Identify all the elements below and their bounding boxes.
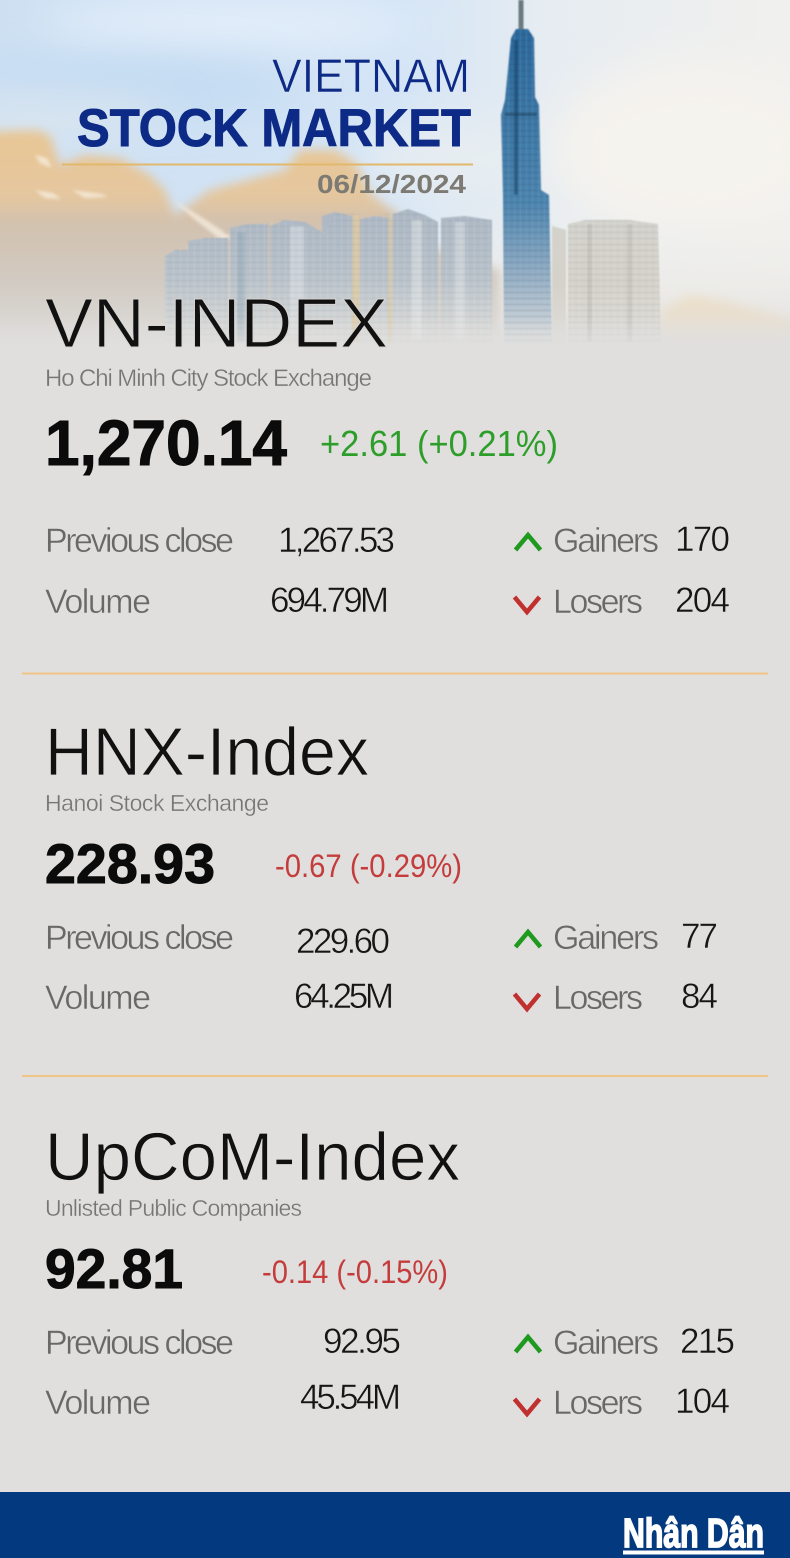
panel: UpCoM-Index [45, 1119, 735, 1422]
panel: VN-INDEX [45, 284, 730, 621]
title [77, 49, 471, 158]
previous close: Previous close [45, 919, 234, 957]
volume: 64.25M [294, 977, 394, 1016]
gainers: 170 [675, 520, 730, 559]
volume: Volume [45, 1384, 151, 1422]
title: VIETNAM [272, 49, 470, 102]
losers [514, 581, 730, 621]
gainers [516, 1322, 735, 1362]
footer bar [0, 1492, 790, 1558]
index value: 1,270.14 [45, 407, 287, 479]
losers: Losers [553, 1384, 643, 1422]
heading: VN-INDEX: VN-INDEX [45, 284, 388, 362]
previous close [45, 521, 395, 560]
volume: Volume [45, 979, 151, 1017]
panel: HNX-Index [45, 714, 718, 1017]
previous close: Previous close [45, 522, 234, 560]
bottom haze over skyline [0, 318, 790, 352]
header photo: sky and clouds [0, 0, 790, 375]
losers: 204 [675, 581, 730, 620]
gainers: 215 [680, 1322, 735, 1361]
index value: 228.93 [45, 832, 215, 895]
heading: HNX-Index: HNX-Index [45, 714, 369, 790]
gainers [516, 917, 718, 957]
volume: Volume [45, 583, 151, 621]
skyline: landmark tower [501, 0, 552, 345]
title: STOCK MARKET [77, 99, 471, 158]
volume: 45.54M [300, 1378, 401, 1417]
volume [45, 977, 394, 1017]
losers: Losers [553, 583, 643, 621]
losers [514, 1382, 730, 1422]
exchange name: Unlisted Public Companies [45, 1195, 302, 1221]
previous close [45, 919, 390, 961]
losers [514, 977, 718, 1017]
gainers: Gainers [553, 919, 659, 957]
gainers: 77 [681, 917, 718, 956]
losers: 104 [675, 1382, 730, 1421]
gainers: Gainers [553, 1324, 659, 1362]
index value: 92.81 [45, 1237, 183, 1300]
volume: 694.79M [270, 581, 389, 620]
exchange name: Hanoi Stock Exchange [45, 790, 269, 816]
exchange name: Ho Chi Minh City Stock Exchange [45, 365, 372, 392]
previous close: 1,267.53 [278, 521, 395, 560]
previous close: 92.95 [323, 1322, 401, 1361]
date: 06/12/2024 [317, 169, 467, 199]
previous close: 229.60 [296, 922, 390, 961]
volume [45, 1378, 401, 1422]
heading: UpCoM-Index: UpCoM-Index [45, 1119, 460, 1195]
previous close [45, 1322, 401, 1362]
losers: Losers [553, 979, 643, 1017]
losers: 84 [681, 977, 718, 1016]
index change: -0.14 (-0.15%) [262, 1254, 448, 1290]
previous close: Previous close [45, 1324, 234, 1362]
skyline: residential towers [165, 209, 661, 345]
index change: -0.67 (-0.29%) [275, 848, 462, 884]
gainers: Gainers [553, 522, 659, 560]
volume [45, 581, 389, 621]
index change: +2.61 (+0.21%) [320, 423, 558, 464]
gainers [516, 520, 730, 560]
